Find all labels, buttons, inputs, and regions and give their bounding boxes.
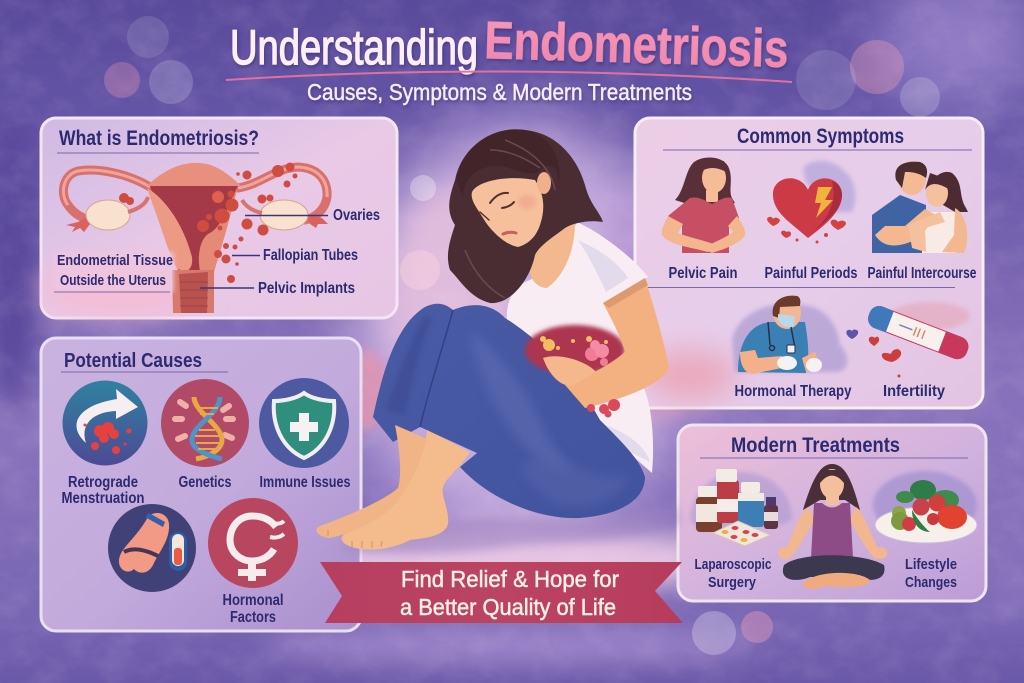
heading: What is Endometriosis?	[59, 127, 259, 150]
uterine cavity	[150, 186, 238, 270]
label: changes: Changes	[905, 574, 957, 591]
label: lifestyle: Lifestyle	[905, 556, 957, 573]
left fallopian tube	[63, 170, 150, 220]
hand on abdomen	[543, 356, 596, 386]
label: infertility: Infertility	[883, 383, 945, 400]
hair top	[456, 129, 560, 196]
right uterine wall	[199, 186, 238, 272]
icon: meditating woman	[778, 464, 887, 589]
left fimbriae	[66, 214, 92, 232]
label: hormonal therapy: Hormonal Therapy	[734, 383, 852, 400]
label backing wash	[54, 252, 174, 292]
title underline	[226, 71, 792, 82]
icon: hormonal factors	[208, 498, 298, 588]
jeans highlights	[470, 330, 570, 470]
shirt shading	[578, 240, 650, 462]
icon: lifestyle factors	[108, 504, 196, 592]
leader: ovaries	[245, 214, 328, 216]
hair back	[448, 129, 603, 303]
label: surgery: Surgery	[708, 574, 757, 591]
facial features	[480, 193, 516, 234]
icon: pelvic pain woman	[662, 157, 745, 253]
heading rule	[57, 152, 259, 154]
face	[472, 178, 543, 247]
right fimbriae	[305, 214, 328, 228]
panel: modern treatments	[678, 425, 986, 601]
left ovary	[86, 200, 130, 230]
pain glow on abdomen	[525, 325, 625, 375]
icon: hormonal therapy doctor	[732, 296, 847, 374]
heading rule	[663, 149, 972, 151]
banner line one: Find Relief & Hope for	[401, 566, 619, 592]
floor shadow	[335, 505, 680, 554]
icon: genetics	[161, 379, 249, 467]
subtitle: Causes, Symptoms & Modern Treatments	[307, 79, 692, 105]
panel: potential causes	[41, 338, 361, 631]
caption rule	[54, 291, 170, 293]
uterus fundus	[147, 163, 241, 186]
title	[226, 11, 792, 105]
label: menstruation: Menstruation	[62, 490, 144, 507]
label: retrograde: Retrograde	[68, 474, 138, 491]
banner line two: a Better Quality of Life	[400, 594, 616, 620]
right fallopian tube	[238, 167, 327, 220]
heading rule	[700, 457, 968, 459]
banner	[320, 562, 683, 623]
label: immune issues: Immune Issues	[260, 474, 350, 491]
panel: what is endometriosis	[40, 118, 397, 318]
icon: small purple heart	[846, 330, 858, 339]
t-shirt	[507, 222, 653, 473]
panel pink wash	[40, 265, 200, 315]
panel background	[41, 338, 361, 631]
icon: retrograde menstruation	[62, 380, 148, 466]
label: fallopian tubes: Fallopian Tubes	[263, 247, 358, 264]
label: genetics: Genetics	[178, 474, 232, 491]
pink splash	[644, 350, 736, 400]
rear foot	[316, 425, 430, 538]
jeans hem seam	[420, 310, 453, 427]
heading: Modern Treatments	[731, 434, 900, 457]
endometrial lesions on abdomen	[540, 336, 609, 366]
front foot	[342, 430, 470, 550]
panel background	[635, 118, 983, 408]
lesions	[119, 162, 298, 283]
label: pelvic implants: Pelvic Implants	[258, 280, 355, 297]
icon: healthy food plate	[873, 471, 977, 543]
icon: immune issues	[259, 378, 349, 468]
label: laparoscopic: Laparoscopic	[694, 556, 772, 573]
label: pelvic pain: Pelvic Pain	[668, 265, 738, 282]
ear	[537, 172, 551, 194]
caption: endometrial tissue: Endometrial Tissue	[57, 252, 173, 269]
label: ovaries: Ovaries	[333, 207, 380, 224]
right ovary	[260, 200, 308, 230]
main figure: woman in pain	[316, 129, 680, 554]
heading: Potential Causes	[64, 350, 202, 372]
icon: infertility test	[865, 302, 971, 378]
cervix	[172, 270, 214, 313]
hair strands	[465, 140, 555, 298]
title word: Understanding: Understanding	[230, 21, 478, 75]
forearm wrap	[565, 278, 669, 408]
title word: Endometriosis: Endometriosis	[484, 11, 789, 79]
jeans	[373, 304, 645, 518]
heading: Common Symptoms	[737, 125, 904, 148]
label: painful intercourse: Painful Intercourse	[868, 265, 977, 282]
leader: pelvic implants	[200, 287, 254, 289]
left uterine wall	[147, 188, 192, 271]
lesions beneath arm	[587, 399, 620, 418]
sleeve shadow	[603, 278, 648, 308]
label: hormonal: Hormonal	[222, 592, 284, 609]
caption: outside the uterus: Outside the Uterus	[60, 272, 166, 289]
uterus diagram	[63, 162, 380, 313]
heading rule	[61, 371, 228, 373]
toes shading	[328, 530, 382, 548]
leader: fallopian tubes	[232, 254, 260, 256]
label: painful periods: Painful Periods	[764, 265, 858, 282]
neck	[530, 222, 575, 288]
icon: couple	[872, 161, 968, 253]
blush	[518, 195, 536, 209]
panel background	[41, 118, 397, 318]
label: factors: Factors	[230, 609, 276, 626]
icon: medication bottles	[690, 469, 792, 546]
panel background	[678, 425, 986, 601]
ribbon shape	[320, 562, 683, 623]
row divider	[640, 286, 955, 288]
icon: painful periods heart	[767, 161, 855, 244]
panel: common symptoms	[635, 118, 983, 408]
